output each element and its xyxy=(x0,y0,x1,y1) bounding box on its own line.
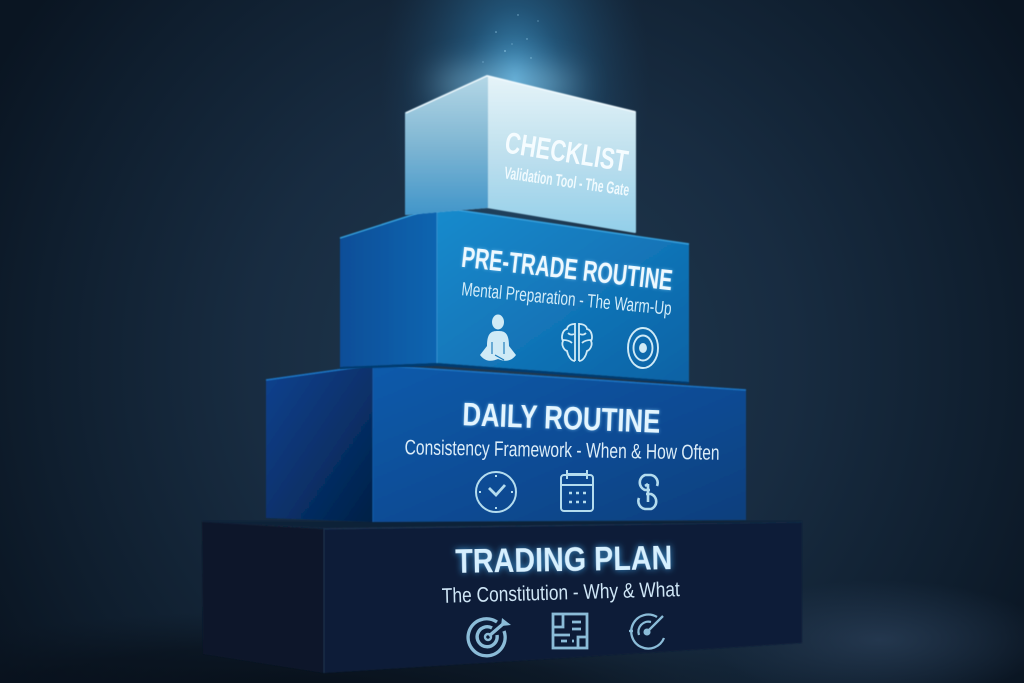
icon: gauge xyxy=(629,615,664,649)
pre-trade routine subtitle: Mental Preparation - The Warm-Up xyxy=(460,279,673,320)
daily block faces xyxy=(266,365,746,522)
icon: meditating person xyxy=(480,314,516,361)
checklist glow halo xyxy=(430,68,580,100)
icon: maze plan xyxy=(553,614,587,648)
icon: clock xyxy=(476,472,516,512)
sparkles above the top block xyxy=(482,14,539,63)
pre-trade routine heading: PRE-TRADE ROUTINE xyxy=(460,242,674,297)
base block faces xyxy=(202,521,802,673)
icon: brain xyxy=(562,323,592,361)
trading plan heading: TRADING PLAN xyxy=(455,539,673,581)
daily routine heading: DAILY ROUTINE xyxy=(462,396,661,440)
block: pre-trade routine xyxy=(340,207,689,384)
checklist subtitle: Validation Tool - The Gate xyxy=(503,163,630,200)
block: trading plan xyxy=(202,521,802,673)
icon: calendar xyxy=(561,470,593,511)
icon: chain link xyxy=(638,475,658,509)
icon: focus target xyxy=(628,328,658,368)
checklist heading: CHECKLIST xyxy=(503,127,630,179)
block: daily routine xyxy=(266,365,746,522)
checklist block faces xyxy=(406,76,635,232)
block: checklist xyxy=(406,68,635,232)
trading plan subtitle: The Constitution - Why & What xyxy=(442,578,680,608)
daily routine subtitle: Consistency Framework - When & How Often xyxy=(404,436,720,465)
pre-trade block faces xyxy=(340,207,689,384)
icon: target with arrow xyxy=(468,618,511,656)
